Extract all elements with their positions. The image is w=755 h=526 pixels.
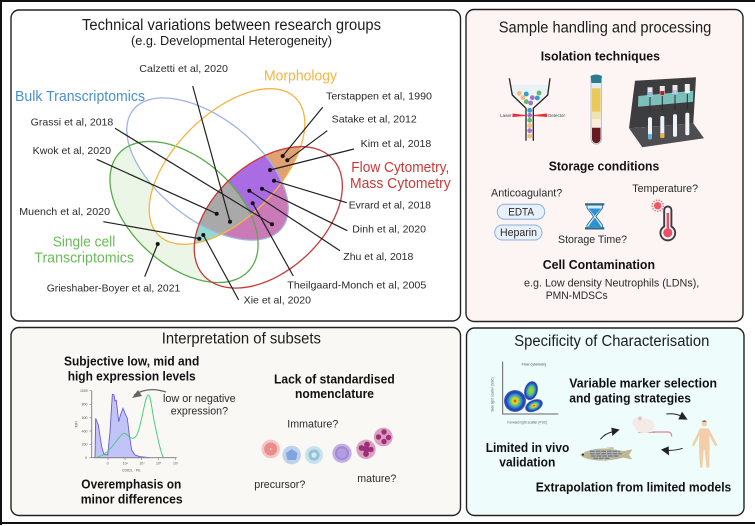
citations: Terstappen et al, 1990 bbox=[326, 90, 432, 102]
icon: flow cell funnel: Detector bbox=[548, 113, 566, 118]
subheading: storage: Storage conditions bbox=[549, 159, 659, 174]
pill: Heparin bbox=[495, 225, 542, 240]
pill: EDTA: EDTA bbox=[508, 207, 535, 219]
subheading: isolation: Isolation techniques bbox=[541, 49, 660, 64]
subheading: (e.g. Developmental Heterogeneity) bbox=[131, 33, 332, 48]
chart: flow cytometry scatter: Forward light scatter (FSC) bbox=[507, 420, 547, 424]
text: contamination examples bbox=[524, 278, 699, 302]
text: contamination examples: e.g. Low density Neutrophils (LDNs), bbox=[524, 278, 699, 290]
chart: expression histogram: 10⁴ bbox=[139, 461, 145, 465]
citations: Kim et al, 2018 bbox=[361, 138, 431, 150]
icon: flow cell funnel bbox=[500, 78, 566, 141]
label: Single cell Transcriptomics: Transcriptomics bbox=[34, 251, 134, 267]
chart: expression histogram: 10⁵ bbox=[156, 461, 162, 465]
text: low or negative: low or negative bbox=[163, 393, 236, 405]
subheading: nomenclature: nomenclature bbox=[295, 386, 374, 401]
text: immature: Immature? bbox=[287, 419, 338, 431]
arrow: to low expression bbox=[132, 390, 166, 398]
subheading: marker selection: and gating strategies bbox=[569, 390, 691, 405]
citations: Calzetti et al, 2020 bbox=[139, 63, 228, 75]
citations: Muench et al, 2020 bbox=[19, 206, 110, 218]
subheading: nomenclature: Lack of standardised bbox=[274, 372, 395, 387]
heading: interpretation: Interpretation of subsets bbox=[162, 330, 321, 347]
text: low or negative: expression? bbox=[171, 405, 228, 417]
venn diagram bbox=[109, 88, 343, 289]
label: Flow Cytometry: Mass Cytometry bbox=[350, 176, 451, 192]
models cycle illustration bbox=[580, 412, 717, 468]
icon: zebrafish bbox=[580, 447, 632, 462]
subheading: subjective levels: Subjective low, mid and bbox=[64, 354, 199, 369]
subheading: subjective levels bbox=[64, 354, 199, 384]
text: low or negative bbox=[163, 393, 236, 417]
citations: Dinh et al, 2020 bbox=[352, 224, 426, 236]
chart: expression histogram: MFI bbox=[74, 421, 78, 427]
label: Flow Cytometry bbox=[350, 160, 451, 192]
subheading: in vivo validation: validation bbox=[499, 455, 555, 470]
arrow: human to fish bbox=[661, 446, 683, 455]
text: storage time: Storage Time? bbox=[558, 234, 627, 246]
subheading: overemphasis bbox=[81, 477, 183, 506]
chart: expression histogram: CD62L - PE bbox=[122, 468, 141, 472]
subheading: marker selection bbox=[569, 376, 717, 405]
icon: tube rack bbox=[629, 77, 704, 147]
heading: specificity: Specificity of Characterisation bbox=[514, 333, 709, 350]
citations: Zhu et al, 2018 bbox=[343, 251, 413, 263]
heading: sample handling: Sample handling and processing bbox=[499, 20, 711, 37]
arrow: mouse to human bbox=[666, 412, 688, 420]
citations: Kwok et al, 2020 bbox=[33, 145, 111, 157]
citations: Theilgaard-Monch et al, 2005 bbox=[287, 280, 426, 292]
icon: thermometer bbox=[652, 200, 675, 240]
chart: expression histogram: 10³ bbox=[123, 461, 129, 465]
citations: Grieshaber-Boyer et al, 2021 bbox=[47, 282, 180, 294]
subheading: in vivo validation: Limited in vivo bbox=[486, 440, 569, 455]
chart: flow cytometry scatter: Side light scatter (SSC) bbox=[491, 377, 495, 412]
panel: sample handling bbox=[466, 10, 743, 322]
subheading: overemphasis: Overemphasis on bbox=[81, 477, 181, 492]
citations: Satake et al, 2012 bbox=[332, 114, 417, 126]
subheading: nomenclature bbox=[274, 372, 395, 401]
panel: interpretation of subsets bbox=[11, 328, 460, 516]
subheading: subjective levels: high expression levels bbox=[68, 369, 196, 384]
label: Morphology: Morphology bbox=[264, 68, 338, 84]
chart: expression histogram: 0 bbox=[107, 461, 109, 465]
chart: flow cytometry scatter bbox=[491, 362, 558, 424]
panel: technical variations bbox=[11, 10, 460, 321]
text: anticoagulant: Anticoagulant? bbox=[491, 188, 562, 200]
subheading: marker selection: Variable marker selection bbox=[569, 376, 717, 391]
subheading: cell contamination: Cell Contamination bbox=[543, 257, 655, 272]
chart: expression histogram bbox=[74, 389, 179, 472]
panel: specificity of characterisation bbox=[466, 328, 744, 516]
icon: hourglass bbox=[585, 204, 604, 228]
subheading: overemphasis: minor differences bbox=[81, 491, 183, 506]
chart: expression histogram: 1000 bbox=[80, 389, 88, 393]
chart: expression histogram: 10⁶ bbox=[173, 461, 179, 465]
text: contamination examples: PMN-MDSCs bbox=[546, 290, 608, 302]
citations bbox=[19, 63, 432, 307]
label: Single cell Transcriptomics: Single cell bbox=[53, 235, 115, 251]
icon: blood tube bbox=[590, 74, 602, 144]
chart: expression histogram: 200 bbox=[82, 443, 88, 447]
subheading: extrapolation: Extrapolation from limited models bbox=[536, 480, 731, 495]
icon: flow cell funnel: Laser bbox=[500, 113, 512, 118]
subheading: in vivo validation bbox=[486, 440, 569, 470]
icon: human bbox=[692, 420, 717, 468]
icon: mouse bbox=[632, 416, 672, 437]
citations: Xie et al, 2020 bbox=[244, 295, 311, 307]
label: Bulk Transcriptomics: Bulk Transcriptomics bbox=[15, 89, 145, 105]
citations: Grassi et al, 2018 bbox=[31, 116, 113, 128]
chart: expression histogram: 800 bbox=[82, 403, 88, 407]
pill: Heparin: Heparin bbox=[500, 227, 537, 239]
cells maturation series bbox=[261, 428, 393, 464]
chart: expression histogram: 600 bbox=[82, 416, 88, 420]
citations: Evrard et al, 2018 bbox=[349, 200, 431, 212]
chart: expression histogram: 0 bbox=[85, 456, 87, 460]
arrow: fish to mouse bbox=[600, 428, 620, 439]
chart: flow cytometry scatter: Flow cytometry bbox=[522, 362, 546, 366]
pill: EDTA bbox=[497, 204, 545, 219]
leader lines and dots bbox=[97, 86, 354, 300]
text: temperature: Temperature? bbox=[632, 183, 698, 195]
label: Flow Cytometry: Flow Cytometry, bbox=[351, 160, 449, 176]
chart: expression histogram: 400 bbox=[82, 429, 88, 433]
heading: technical variations: Technical variations between research groups bbox=[82, 17, 381, 34]
text: precursor: precursor? bbox=[254, 479, 305, 491]
text: mature: mature? bbox=[357, 473, 396, 485]
label: Single cell Transcriptomics bbox=[34, 235, 134, 267]
